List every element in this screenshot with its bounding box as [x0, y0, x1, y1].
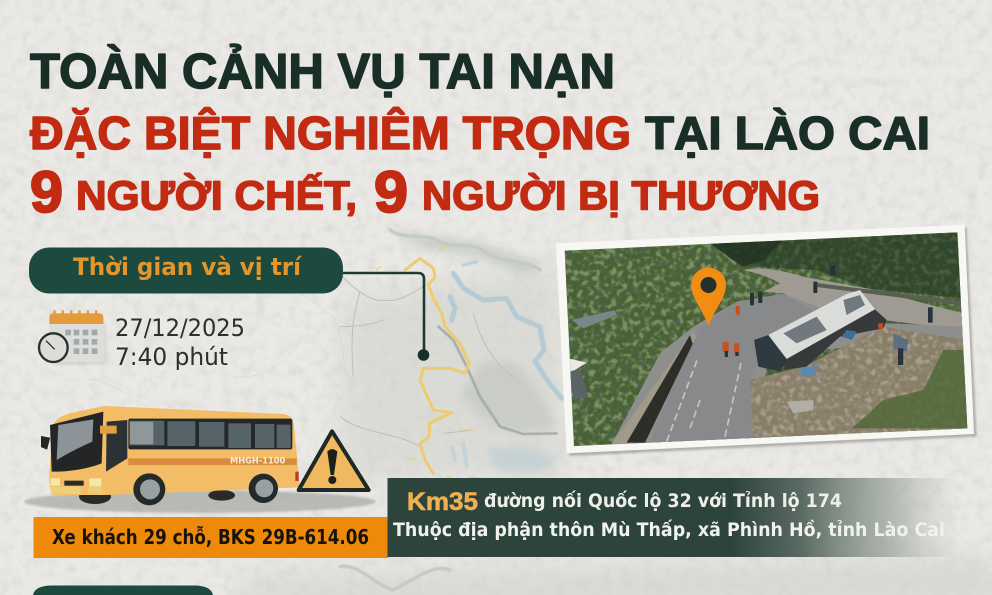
date and time text: 7:40 phút	[115, 343, 228, 371]
title: TOÀN CẢNH VỤ TAI NẠN	[30, 44, 615, 99]
location band: Thuộc địa phận thôn Mù Thấp, xã Phình Hồ, tỉnh Lào Cai	[393, 518, 945, 541]
label: bus type and plate: Xe khách 29 chỗ, BKS 29B-614.06	[52, 525, 369, 549]
title: ĐẶC BIỆT NGHIÊM TRỌNG	[30, 107, 631, 159]
icon: warning triangle	[299, 431, 369, 490]
title: 9	[30, 160, 63, 225]
location band	[388, 478, 962, 557]
illustration: yellow bus	[24, 406, 376, 513]
date and time text	[115, 314, 245, 371]
left map lines	[87, 293, 400, 450]
icon: calendar and clock	[39, 310, 106, 364]
icon: orange map pin	[691, 268, 726, 326]
photo: crash scene	[556, 225, 977, 456]
title: NGƯỜI CHẾT,	[76, 172, 357, 218]
illustration: yellow bus: MHGH-1100	[230, 456, 285, 466]
location band: Km35	[407, 488, 478, 516]
title: NGƯỜI BỊ THƯƠNG	[422, 172, 820, 218]
heading pill: time and location	[29, 248, 343, 294]
next section pill, cropped at bottom edge	[33, 586, 213, 595]
background map: terrain, rivers	[340, 230, 562, 590]
title	[30, 44, 930, 225]
title: TẠI LÀO CAI	[645, 107, 930, 159]
date and time text: 27/12/2025	[115, 314, 245, 342]
label: bus type and plate	[34, 517, 388, 558]
connector line from pill to map dot	[340, 273, 429, 361]
location band: đường nối Quốc lộ 32 với Tỉnh lộ 174	[484, 489, 842, 512]
heading pill: time and location: Thời gian và vị trí	[73, 253, 303, 281]
yellow road route on the map	[377, 245, 483, 478]
title: 9	[374, 160, 408, 225]
